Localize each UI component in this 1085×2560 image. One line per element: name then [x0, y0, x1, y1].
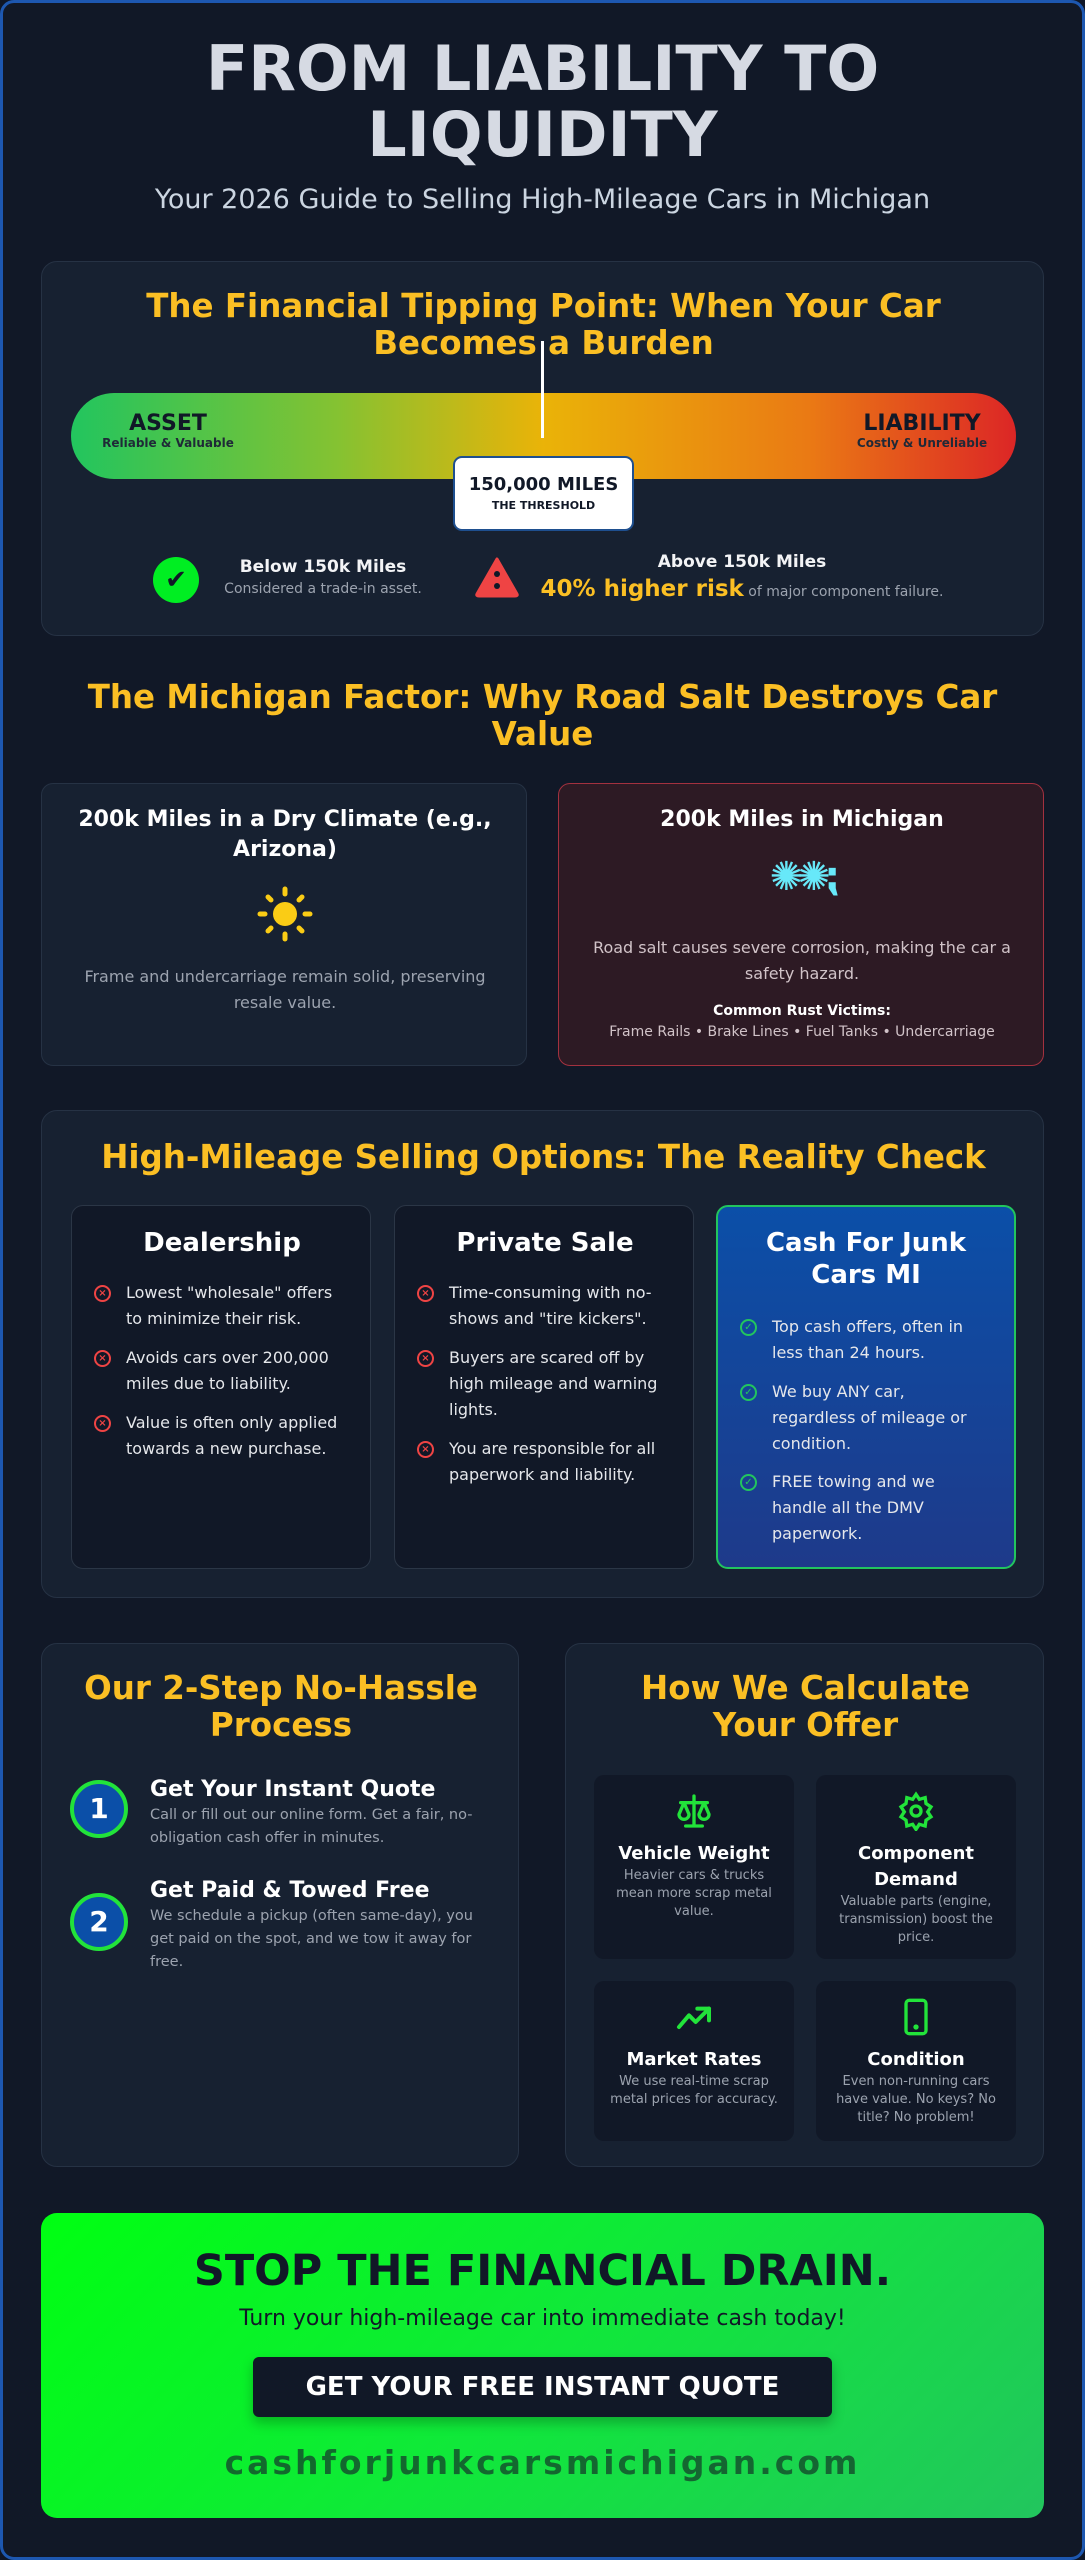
tile: component demand: Demand	[874, 1869, 958, 1890]
above 150k text: 40% higher risk of major component failure.	[541, 576, 943, 602]
tile: component demand	[816, 1775, 1016, 1959]
card: cash for junk cars: Cash For Junk	[766, 1228, 966, 1258]
card: private sale: ×	[421, 1444, 430, 1455]
CTA panel	[41, 2213, 1044, 2518]
card: private sale: ×	[421, 1353, 430, 1364]
card: dealership: Lowest "wholesale" offers to minimize their risk.	[126, 1283, 332, 1328]
liability label	[857, 411, 987, 450]
icon: sun	[258, 886, 312, 942]
tile: component demand: Component	[858, 1843, 974, 1864]
card: private sale	[394, 1205, 694, 1569]
card: cash for junk cars: ✓	[744, 1387, 753, 1398]
heading: Becomes a Burden	[373, 324, 714, 362]
liability label: Costly & Unreliable	[857, 436, 987, 450]
CTA subtext: Turn your high-mileage car into immediate cash today!	[239, 2306, 846, 2331]
title	[78, 807, 492, 862]
asset label: ASSET	[129, 411, 207, 436]
card: private sale: ×	[421, 1288, 430, 1299]
heading	[146, 287, 941, 362]
card: cash for junk cars: We buy ANY car, regardless of mileage or condition.	[772, 1382, 967, 1453]
title: FROM LIABILITY TO	[206, 32, 879, 105]
card: michigan	[558, 783, 1044, 1066]
tile: market rates	[594, 1981, 794, 2141]
heading	[84, 1669, 478, 1744]
CTA button: GET YOUR FREE INSTANT QUOTE	[306, 2372, 779, 2402]
heading	[641, 1669, 970, 1744]
tile: vehicle weight: Heavier cars & trucks mean more scrap metal value.	[616, 1868, 772, 1919]
heading: How We Calculate	[641, 1669, 970, 1707]
rust victims: Frame Rails • Brake Lines • Fuel Tanks • Undercarriage	[609, 1024, 995, 1040]
step 1	[70, 1777, 472, 1846]
heading: Our 2-Step No-Hassle	[84, 1669, 478, 1707]
panel: financial tipping point	[41, 261, 1044, 636]
panel: 2-step process	[41, 1643, 519, 2167]
heading: Process	[210, 1706, 352, 1744]
title: Arizona)	[233, 837, 337, 862]
card: dealership: Avoids cars over 200,000 miles due to liability.	[126, 1348, 329, 1393]
step 2: 2	[89, 1905, 109, 1938]
heading: Your Offer	[713, 1706, 898, 1744]
step 2: We schedule a pickup (often same-day), you get paid on the spot, and we tow it away for free.	[150, 1908, 473, 1970]
below 150k text: Considered a trade-in asset.	[224, 581, 422, 597]
card: private sale: You are responsible for all paperwork and liability.	[449, 1439, 655, 1484]
card: dealership: ×	[98, 1288, 107, 1299]
panel: selling options	[41, 1110, 1044, 1598]
tile: condition: Condition	[867, 2049, 965, 2070]
tile: vehicle weight	[594, 1775, 794, 1959]
step 1: 1	[89, 1792, 109, 1825]
card: dealership	[71, 1205, 371, 1569]
icon: check: ✔	[165, 565, 187, 595]
card: cash for junk cars: Top cash offers, often in less than 24 hours.	[772, 1317, 963, 1362]
heading: michigan factor: The Michigan Factor: Why Road Salt Destroys Car	[88, 678, 997, 716]
card: private sale: Time-consuming with no-shows and "tire kickers".	[449, 1283, 652, 1328]
heading: michigan factor: Value	[492, 715, 593, 753]
step 1: Call or fill out our online form. Get a fair, no-obligation cash offer in minutes.	[150, 1807, 472, 1846]
title: 200k Miles in Michigan	[660, 807, 944, 832]
gauge bar	[71, 393, 1016, 479]
tile: component demand: Valuable parts (engine, transmission) boost the price.	[839, 1894, 993, 1945]
above 150k text: Above 150k Miles	[658, 552, 826, 572]
liability label: LIABILITY	[863, 411, 981, 436]
step 1: Get Your Instant Quote	[150, 1777, 435, 1802]
needle	[541, 341, 544, 438]
below 150k text: Below 150k Miles	[240, 557, 406, 577]
heading: High-Mileage Selling Options: The Reality Check	[101, 1138, 986, 1176]
card: dealership: Dealership	[143, 1228, 301, 1258]
card: cash for junk cars: Cars MI	[811, 1260, 921, 1290]
threshold box	[453, 456, 634, 531]
asset label: Reliable & Valuable	[102, 436, 234, 450]
rust victims: Common Rust Victims:	[713, 1003, 891, 1019]
tile: condition	[816, 1981, 1016, 2141]
card: private sale: Buyers are scared off by high mileage and warning lights.	[449, 1348, 657, 1419]
asset label	[102, 411, 234, 450]
card: cash for junk cars: ✓	[744, 1477, 753, 1488]
below 150k text	[224, 557, 422, 597]
rust victims	[609, 1003, 995, 1040]
card: private sale: Private Sale	[456, 1228, 634, 1258]
panel: offer calculation	[565, 1643, 1044, 2167]
title: 200k Miles in a Dry Climate (e.g.,	[78, 807, 492, 832]
step 2: Get Paid & Towed Free	[150, 1878, 430, 1903]
subtitle: Your 2026 Guide to Selling High-Mileage Cars in Michigan	[155, 184, 930, 215]
tile: market rates: We use real-time scrap metal prices for accuracy.	[610, 2074, 778, 2107]
text: Road salt causes severe corrosion, making the car a safety hazard.	[593, 938, 1011, 983]
title: LIQUIDITY	[367, 98, 718, 171]
title	[206, 32, 879, 171]
card: cash for junk cars	[716, 1205, 1016, 1569]
heading: The Financial Tipping Point: When Your Car	[146, 287, 941, 325]
above 150k text	[541, 552, 943, 602]
text: Frame and undercarriage remain solid, preserving resale value.	[84, 967, 486, 1012]
website url: cashforjunkcarsmichigan.com	[225, 2443, 860, 2482]
heading: michigan factor	[88, 678, 998, 753]
CTA heading: STOP THE FINANCIAL DRAIN.	[194, 2246, 891, 2296]
card: cash for junk cars: ✓	[744, 1322, 753, 1333]
CTA button	[253, 2357, 832, 2417]
icon: salt/ice: ✺✺⁏	[769, 854, 835, 900]
card: dealership: ×	[98, 1418, 107, 1429]
tile: condition: Even non-running cars have value. No keys? No title? No problem!	[836, 2074, 996, 2125]
tile: vehicle weight: Vehicle Weight	[618, 1843, 770, 1864]
threshold box: 150,000 MILES	[469, 474, 618, 495]
card: dealership: Value is often only applied towards a new purchase.	[126, 1413, 337, 1458]
icon: check	[153, 557, 199, 603]
threshold box: THE THRESHOLD	[492, 499, 595, 512]
icon: warning	[475, 557, 519, 598]
step 2	[70, 1878, 473, 1970]
tile: market rates: Market Rates	[626, 2049, 762, 2070]
card: cash for junk cars: FREE towing and we handle all the DMV paperwork.	[772, 1472, 935, 1543]
card: dry climate	[41, 783, 527, 1066]
card: dealership: ×	[98, 1353, 107, 1364]
